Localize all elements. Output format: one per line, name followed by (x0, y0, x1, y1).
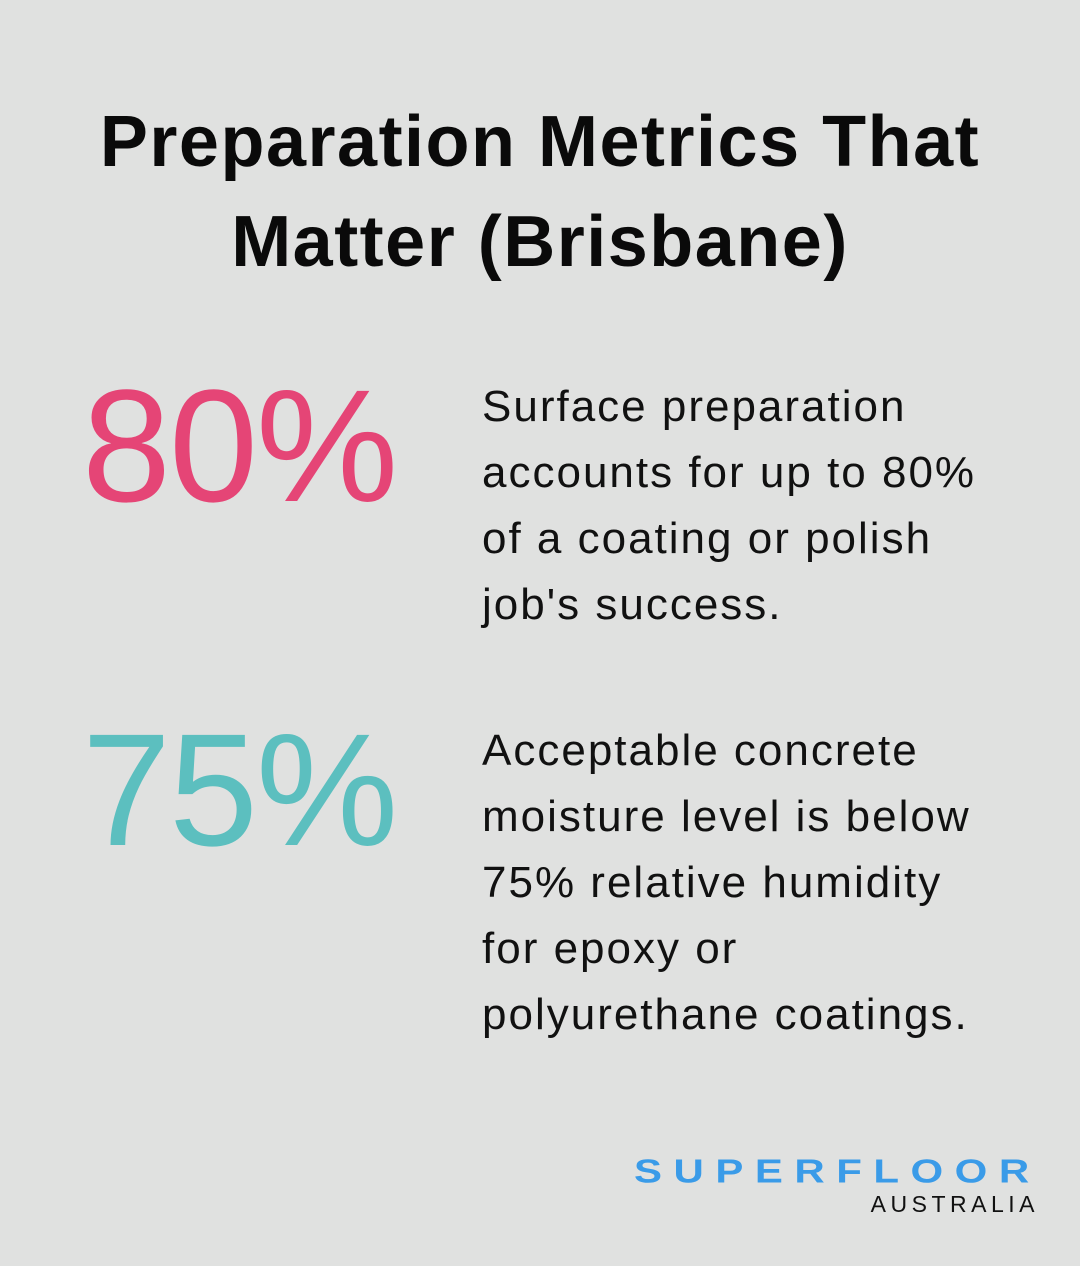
title: Preparation Metrics That (100, 102, 980, 182)
stat: 80%: 80% (82, 356, 396, 535)
text: 75% description: 75% relative humidity (482, 858, 942, 907)
text: 75% description (482, 726, 971, 1039)
text: 80% description: accounts for up to 80% (482, 448, 976, 497)
text: 75% description: for epoxy or (482, 924, 738, 973)
text: 80% description (480, 382, 976, 629)
title: Matter (Brisbane) (231, 202, 849, 282)
text: 80% description: of a coating or polish (482, 514, 932, 563)
title (100, 102, 980, 282)
text: 75% description: Acceptable concrete (482, 726, 919, 775)
logo (634, 1152, 1041, 1217)
text: 75% description: polyurethane coatings. (482, 990, 969, 1039)
text: 80% description: Surface preparation (482, 382, 906, 431)
stat: 75%: 75% (82, 700, 396, 879)
text: 80% description: job's success. (482, 580, 783, 629)
text: 75% description: moisture level is below (482, 792, 971, 841)
logo: SUPERFLOOR (634, 1152, 1041, 1190)
logo: AUSTRALIA (871, 1191, 1039, 1217)
